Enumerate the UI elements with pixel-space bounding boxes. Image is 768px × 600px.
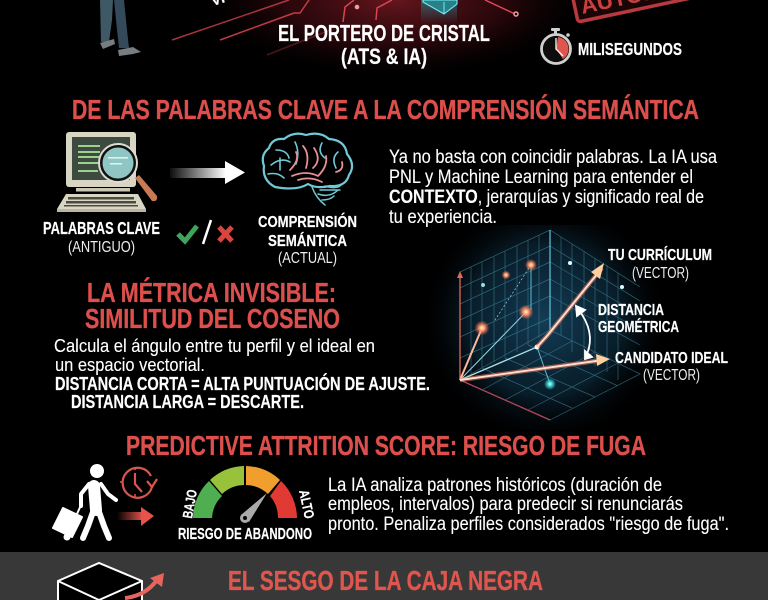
vectors to data points bbox=[460, 265, 550, 384]
label: tu curriculum: TU CURRÍCULUM bbox=[608, 245, 712, 264]
label: tu curriculum: (VECTOR) bbox=[632, 265, 689, 282]
text block: similitud: DISTANCIA CORTA = ALTA PUNTUACIÓN DE AJUSTE. bbox=[55, 373, 430, 394]
circuit lines bbox=[172, 0, 518, 55]
heading: el portero de cristal: EL PORTERO DE CRISTAL bbox=[278, 20, 490, 46]
heading: el sesgo: EL SESGO DE LA CAJA NEGRA bbox=[228, 565, 543, 596]
text block: contexto: Ya no basta con coincidir palabras. La IA usa bbox=[389, 147, 717, 168]
label: milisegundos: MILISEGUNDOS bbox=[578, 39, 682, 59]
text block: riesgo de fuga bbox=[328, 475, 729, 535]
vector: tu curriculum bbox=[537, 263, 604, 347]
label: candidato ideal bbox=[615, 350, 728, 384]
text block: contexto: PNL y Machine Learning para entender el bbox=[389, 167, 693, 188]
label: distancia geometrica: DISTANCIA bbox=[598, 302, 664, 319]
icon: check slash cross bbox=[178, 220, 232, 244]
chart: vector space bbox=[430, 225, 728, 430]
text block: similitud: DISTANCIA LARGA = DESCARTE. bbox=[71, 391, 304, 412]
label: comprension semantica: COMPRENSIÓN bbox=[258, 212, 357, 231]
text block: riesgo de fuga: La IA analiza patrones históricos (duración de bbox=[328, 475, 662, 496]
label: comprension semantica bbox=[258, 212, 357, 267]
label: palabras clave: PALABRAS CLAVE bbox=[43, 218, 160, 238]
heading: la metrica invisible: SIMILITUD DEL COSENO bbox=[85, 303, 340, 334]
grid walls and floor bbox=[460, 230, 640, 420]
heading: el portero de cristal: (ATS & IA) bbox=[341, 44, 427, 69]
illustration: person legs bbox=[100, 0, 141, 56]
heading: el portero de cristal bbox=[278, 20, 490, 69]
text block: contexto bbox=[389, 147, 717, 228]
arrow: leaving bbox=[117, 507, 154, 526]
needle bbox=[241, 493, 267, 522]
icon: person leaving with suitcase bbox=[53, 464, 157, 540]
label: palabras clave: (ANTIGUO) bbox=[68, 239, 135, 256]
arrow: distancia geometrica bbox=[576, 306, 592, 359]
arrow: out of box bbox=[125, 573, 164, 598]
stamp: automatic bbox=[568, 0, 710, 22]
icon: computer with magnifier bbox=[57, 132, 157, 212]
label: tu curriculum bbox=[608, 245, 712, 282]
label: candidato ideal: CANDIDATO IDEAL bbox=[615, 350, 728, 367]
data points bbox=[474, 259, 624, 390]
text block: similitud bbox=[54, 335, 430, 412]
icon: stopwatch bbox=[542, 28, 570, 64]
icon: brain bbox=[263, 134, 352, 205]
panel: caja negra bbox=[0, 552, 768, 600]
label: alto: ALTO bbox=[296, 488, 318, 520]
icon: clock bbox=[120, 467, 157, 498]
text block: similitud: Calcula el ángulo entre tu perfil y el ideal en bbox=[54, 335, 375, 356]
red glow behind the circuit bbox=[170, 0, 620, 85]
vector: candidato ideal bbox=[460, 354, 610, 380]
text block: contexto: CONTEXTO, jerarquías y significado real de bbox=[389, 187, 704, 208]
label: comprension semantica: SEMÁNTICA bbox=[268, 231, 347, 250]
label: distancia geometrica: GEOMÉTRICA bbox=[598, 317, 679, 336]
heading: la metrica invisible bbox=[85, 277, 340, 334]
gauge: riesgo de abandono bbox=[178, 466, 318, 543]
text block: contexto: tu experiencia. bbox=[389, 207, 497, 228]
label: distancia geometrica bbox=[598, 302, 679, 336]
heading: la metrica invisible: LA MÉTRICA INVISIBLE: bbox=[87, 277, 336, 308]
label: bajo: BAJO bbox=[179, 488, 200, 520]
icon: black box bbox=[58, 563, 142, 600]
panel: hero crop bbox=[100, 0, 710, 85]
label: candidato ideal: (VECTOR) bbox=[643, 367, 700, 384]
icon: crystal cube bbox=[421, 0, 457, 24]
label: comprension semantica: (ACTUAL) bbox=[278, 250, 337, 267]
arrow: old to new bbox=[170, 161, 245, 184]
label: palabras clave bbox=[43, 218, 160, 256]
text block: similitud: un espacio vectorial. bbox=[55, 354, 205, 375]
blue glow behind grid bbox=[430, 225, 665, 430]
axes bbox=[457, 230, 550, 420]
label: riesgo: RIESGO DE ABANDONO bbox=[178, 526, 312, 543]
text block: riesgo de fuga: empleos, intervalos) para predecir si renunciarás bbox=[328, 494, 683, 515]
